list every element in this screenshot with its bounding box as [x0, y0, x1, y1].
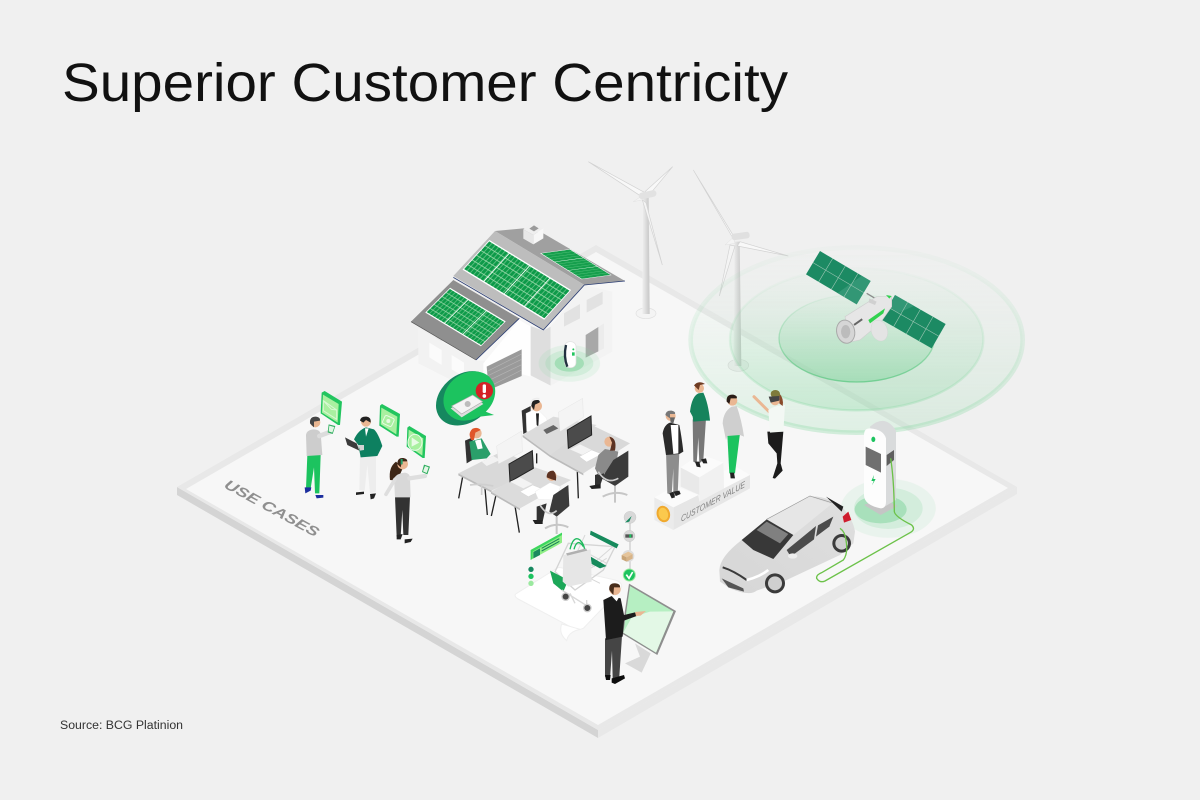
- person: man with phone: [305, 417, 335, 498]
- wind turbine: front: [693, 170, 788, 371]
- chimney: [523, 223, 543, 244]
- person: woman with phone: [386, 458, 430, 543]
- EV charging station and car: [719, 421, 936, 593]
- illustration: [177, 162, 1023, 738]
- step dots: [528, 567, 534, 586]
- customer card: [531, 533, 562, 560]
- customer value podium and people: [654, 382, 785, 530]
- person: man with laptop: [345, 417, 382, 499]
- touchscreen kiosk: [622, 584, 676, 673]
- person: man in grey sweater: [723, 395, 744, 478]
- gold coin: [655, 504, 672, 524]
- signal rings around satellite: [691, 247, 1023, 433]
- solar panels: main roof: [463, 241, 570, 319]
- charging rings: [841, 479, 936, 538]
- agent: top, white shirt: [522, 398, 550, 434]
- source note: Source: BCG Platinion: [60, 720, 183, 732]
- person: presenter: [603, 583, 646, 684]
- agent: left, orange hair: [465, 428, 491, 463]
- solar wing: right: [881, 295, 946, 348]
- shopping cart: [550, 531, 619, 612]
- label: customer value: CUSTOMER VALUE: [681, 479, 746, 524]
- satellite body: [834, 293, 892, 345]
- house walls: [418, 285, 612, 387]
- roof planes: [411, 228, 625, 360]
- podium blocks: [654, 454, 750, 530]
- charging cable: [817, 458, 913, 582]
- charging pillar: [864, 421, 897, 515]
- isometric platform: [177, 245, 1017, 738]
- group: use-case people and app tiles: [305, 391, 430, 543]
- agent: front, white shirt: [533, 471, 569, 534]
- app tile: mail: [321, 391, 342, 425]
- solar panels: lower roof: [426, 288, 505, 346]
- delivery step icons: [622, 511, 636, 581]
- solar panels: rear roof: [541, 249, 611, 279]
- person: man in blazer: [663, 411, 683, 498]
- shopping bag: [563, 539, 592, 587]
- label: use cases: USE CASES: [221, 476, 324, 540]
- garage door: [487, 349, 522, 387]
- app tile: camera: [379, 404, 400, 437]
- solar wing: left: [806, 251, 871, 304]
- wall charger with signal rings: [539, 342, 600, 382]
- title: Superior Customer Centricity: [62, 53, 788, 113]
- monitors: [482, 398, 602, 497]
- call centre desks and agents: [458, 398, 630, 534]
- shop scene: [515, 511, 676, 684]
- house with solar roof: [411, 223, 625, 387]
- chair base: left desk: [470, 484, 493, 495]
- agent: right, brown hair: [589, 437, 628, 503]
- white plate with bubble tail: [515, 567, 622, 641]
- wind turbine: rear: [588, 162, 673, 319]
- person: woman with VR headset: [754, 390, 785, 479]
- person: woman in green sweater: [690, 382, 710, 467]
- desk tops: [458, 417, 630, 510]
- satellite: [806, 251, 946, 348]
- green speech bubble alert: [425, 360, 505, 437]
- car: [719, 496, 855, 593]
- app tile: play: [407, 426, 426, 458]
- desk legs: [459, 453, 578, 533]
